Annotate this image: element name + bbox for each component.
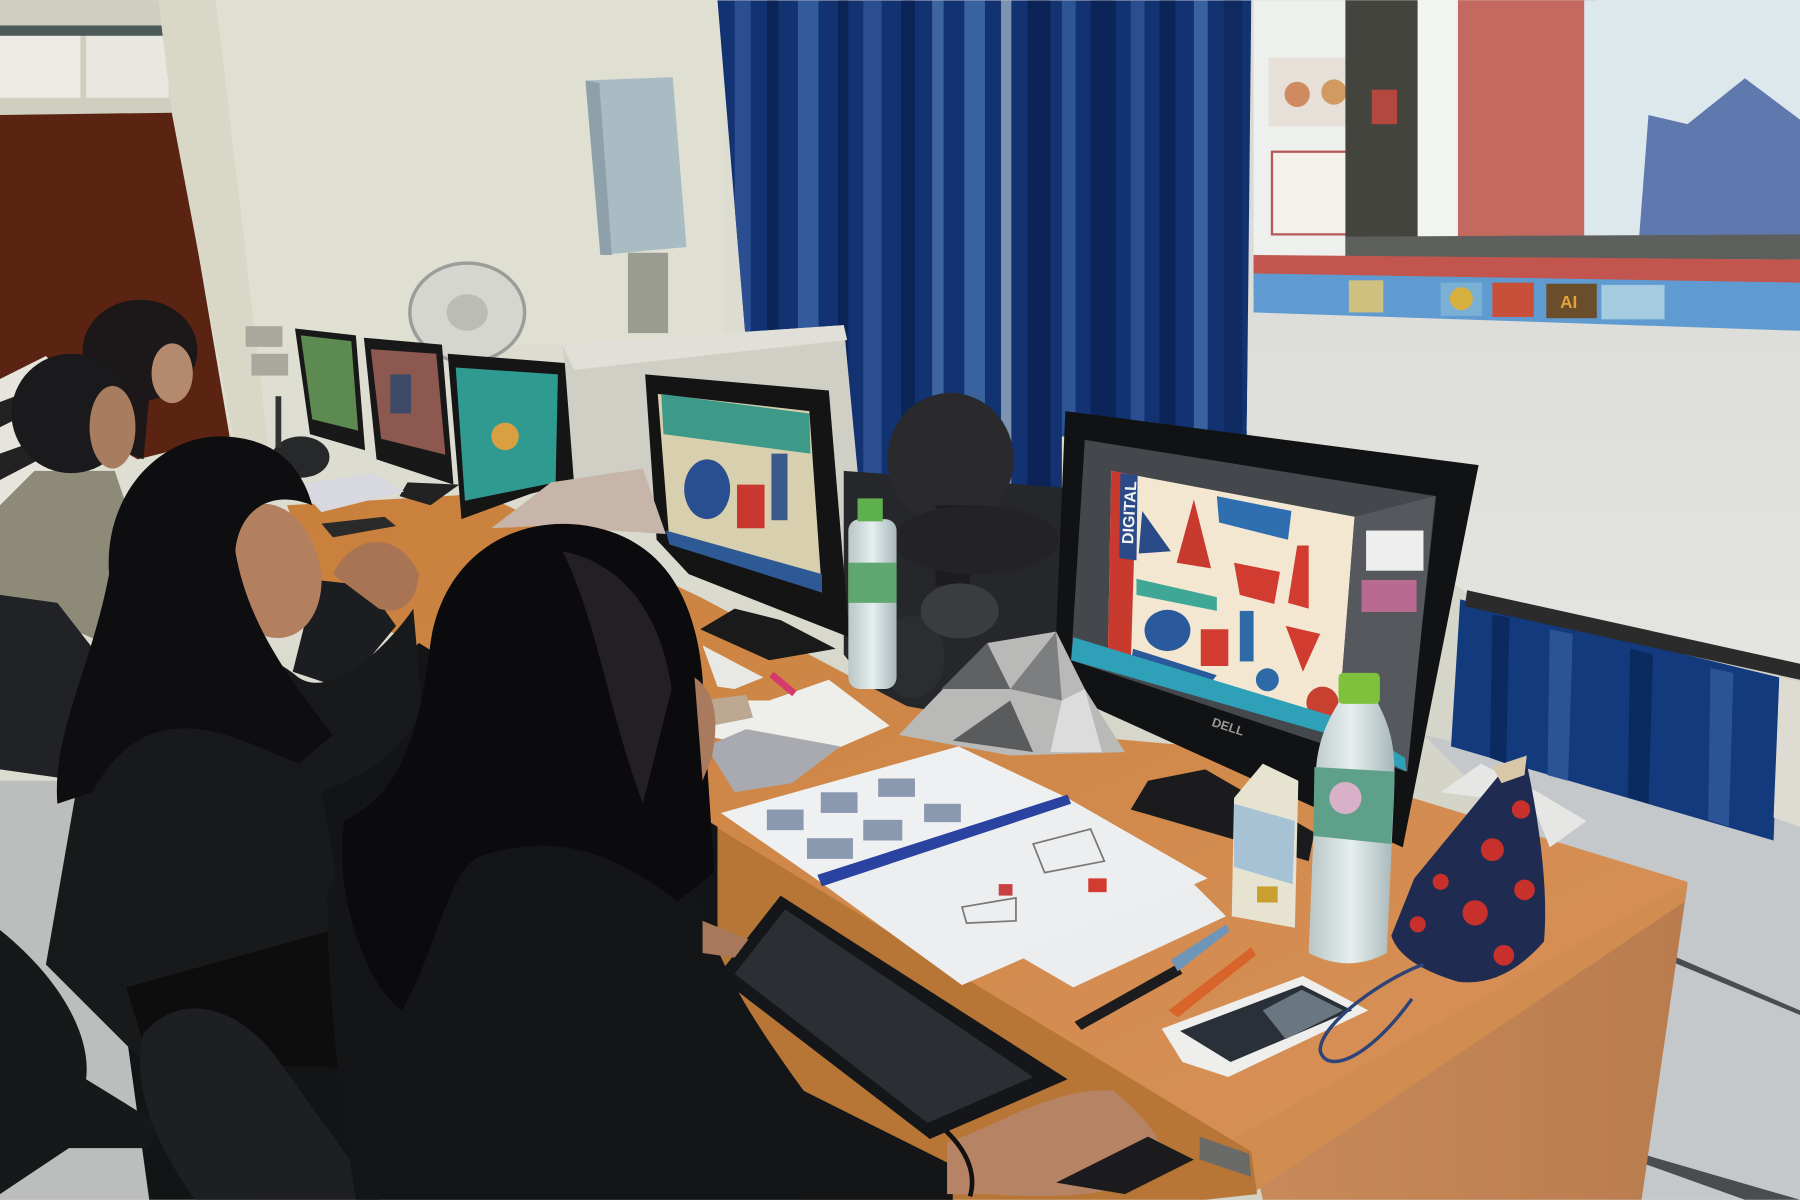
smartphone (1162, 976, 1368, 1077)
computer mouse (1056, 1137, 1194, 1194)
binder on desk back (296, 473, 404, 512)
dark area behind main monitor (844, 471, 1068, 735)
forearm hand on mouse (947, 1090, 1162, 1196)
wall right edge (1774, 677, 1800, 827)
computer keyboard (717, 896, 1068, 1139)
artwork title: DIGITAL (1119, 480, 1140, 545)
chair left background (0, 595, 98, 781)
floor (0, 735, 1800, 1200)
projection screen (1247, 0, 1800, 664)
monitor far 2 (364, 338, 459, 505)
chair foreground left (0, 930, 161, 1194)
handbag beige (491, 469, 666, 534)
projected slide (1254, 0, 1800, 331)
navy polka dot pouch (1391, 756, 1545, 982)
monitor far 1 (295, 329, 365, 450)
wooden desk (287, 494, 1688, 1200)
fingers on keyboard (703, 921, 748, 958)
printer cabinet (562, 325, 859, 551)
light switches (246, 326, 288, 376)
hair (57, 436, 333, 804)
keyboard tray (700, 818, 1257, 1200)
screen (1071, 440, 1436, 772)
black jacket (46, 609, 422, 1068)
hair (342, 524, 714, 1010)
doorway and window (0, 0, 270, 459)
monitor far 3 (448, 354, 574, 519)
desk side panel (1251, 884, 1688, 1200)
chair foreground centre (140, 1008, 379, 1200)
back monitors (295, 329, 849, 660)
face (224, 503, 322, 638)
loose paper right (1010, 884, 1226, 987)
snack wrapper (706, 729, 840, 792)
monitor mid (645, 374, 849, 660)
blue curtain (712, 0, 1257, 505)
small phone on desk (703, 695, 753, 726)
phone on back desk (321, 517, 396, 537)
main large monitor (1054, 411, 1479, 861)
stand (1131, 769, 1314, 861)
papers on desk (698, 645, 890, 758)
hand (333, 542, 419, 611)
water bottle back (848, 498, 897, 689)
water bottle front (1309, 673, 1395, 963)
person: woman in front in black (327, 524, 1162, 1200)
office chair back (887, 393, 1058, 586)
headphones (880, 583, 999, 698)
pens (1074, 924, 1256, 1030)
person: background woman (0, 300, 197, 505)
person: background man (0, 354, 135, 643)
person: woman at left in black (46, 436, 422, 1068)
taskbar illustrator icon: AI (1560, 292, 1577, 312)
plastic bag (1441, 764, 1586, 847)
bracelet (946, 1131, 972, 1196)
geometric metallic handbag (899, 632, 1125, 756)
phone lanyard (1320, 964, 1423, 1061)
milk carton (1232, 764, 1298, 928)
black blouse (327, 792, 953, 1200)
wall fan (410, 263, 525, 362)
desk brand label (1200, 1137, 1251, 1177)
monitor brand: DELL (1210, 715, 1246, 739)
electrical box (585, 77, 686, 333)
lower blue curtain (1451, 590, 1800, 840)
dark shadow behind seated people (126, 643, 953, 1200)
chair back beside left woman (293, 580, 396, 689)
face sliver (695, 677, 715, 781)
spiral workbook (721, 746, 1208, 985)
headset mic left (272, 396, 329, 478)
